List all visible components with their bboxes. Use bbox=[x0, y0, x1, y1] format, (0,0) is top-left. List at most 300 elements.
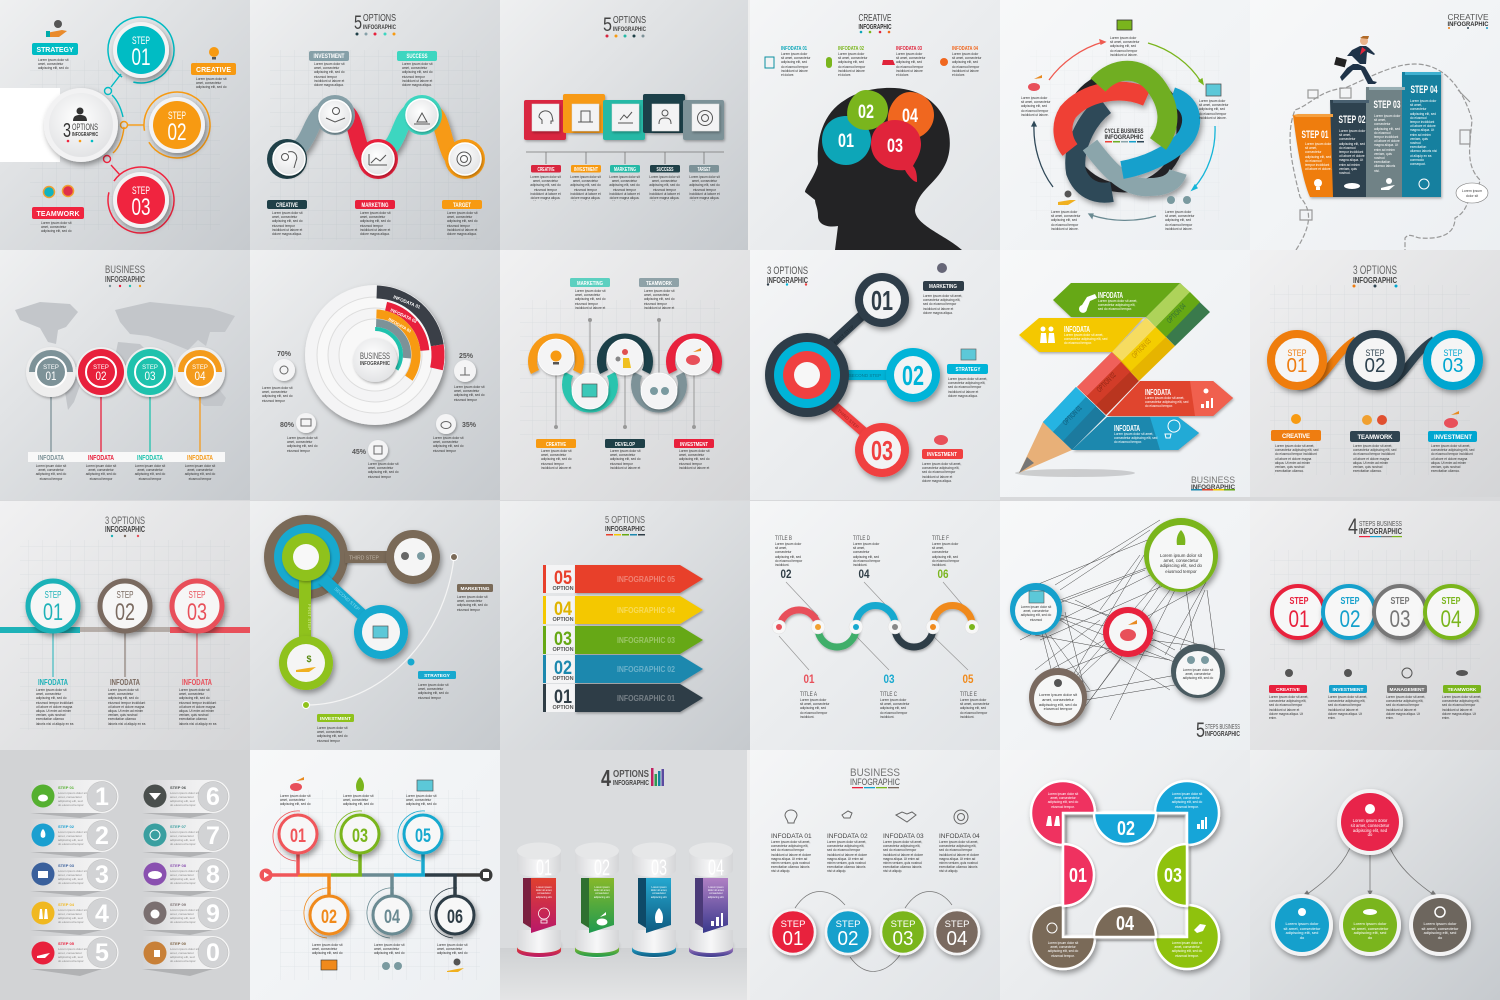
arc labels: INFODATA 01 bbox=[393, 294, 422, 310]
step captions: STEP 07 bbox=[170, 824, 187, 829]
digits: 9 bbox=[206, 900, 220, 928]
option numbers: OPTION bbox=[552, 617, 574, 623]
column headings: INFODATA 03 bbox=[883, 833, 924, 840]
panel: 5 options wave bbox=[250, 0, 500, 250]
labels bbox=[317, 584, 493, 722]
node second bbox=[354, 605, 408, 659]
step labels: STEP bbox=[945, 919, 969, 930]
brain: 04 bbox=[902, 106, 918, 127]
cylinder 03 bbox=[632, 842, 676, 958]
labels: CREATIVE bbox=[538, 167, 555, 173]
segment 1 blue bbox=[1043, 387, 1106, 450]
step 01: 01 bbox=[1288, 606, 1310, 633]
card text col 2: adipiscing elit, sed bbox=[170, 916, 195, 920]
step captions: STEP 00 bbox=[170, 941, 187, 946]
box icons bbox=[539, 110, 712, 126]
step 02: STEP bbox=[116, 590, 134, 601]
discs: 02 bbox=[96, 369, 107, 383]
thin curve bbox=[306, 557, 454, 705]
percent callouts: 25% bbox=[459, 353, 474, 360]
card text col 2: adipiscing elit, sed bbox=[170, 955, 195, 959]
panel: concentric rings bbox=[250, 250, 500, 500]
option numbers: OPTION bbox=[552, 705, 574, 711]
digits: 3 bbox=[95, 861, 109, 889]
bar headings: STEP 01 bbox=[1302, 129, 1328, 141]
ring 01: STEP bbox=[1288, 348, 1306, 358]
percent callouts: 70% bbox=[277, 351, 292, 358]
infodata strip: INFODATA bbox=[187, 455, 213, 462]
panel: 4 cylinders bbox=[500, 750, 750, 1000]
cylinder 02 bbox=[575, 842, 619, 958]
panel: 5 option arrows bbox=[500, 501, 750, 750]
corner blue: Lorem ipsum dolor sit amet, consectetur adipiscing elit, sed do eiusmod tempor. bbox=[1172, 792, 1202, 809]
blue arrow: Lorem ipsum dolor sit amet, consectetur adipiscing elit, sed do eiusmod tempor. bbox=[1114, 432, 1157, 444]
column headings: INFODATA 04 bbox=[939, 833, 980, 840]
step 01: STEP bbox=[1290, 596, 1309, 607]
ring center: INFOGRAPHIC bbox=[360, 361, 390, 367]
step 01: 01 bbox=[132, 44, 150, 71]
cylinder 04: 04 bbox=[708, 855, 724, 880]
card text col 1: amet, consectetur bbox=[58, 795, 82, 799]
step labels: 03 bbox=[892, 928, 914, 950]
title bbox=[1196, 719, 1240, 742]
text investment: Lorem ipsum dolor sit amet, consectetur adipiscing elit, sed do eiusmod tempor incididunt ut labore et dolore magna aliqua. bbox=[922, 462, 961, 483]
world map bbox=[15, 302, 235, 410]
card text col 1: adipiscing elit, sed bbox=[58, 799, 83, 803]
ring 03 bbox=[1427, 334, 1479, 386]
step captions: STEP 02 bbox=[58, 824, 75, 829]
card text col 1: adipiscing elit, sed bbox=[58, 877, 83, 881]
boxes bbox=[524, 94, 724, 140]
arm labels bbox=[833, 324, 881, 430]
panel: 3 options ribbon bbox=[0, 501, 250, 750]
node 06: 06 bbox=[447, 907, 463, 928]
creative text: Lorem ipsum dolor sit amet, consectetur adipiscing elit, sed do bbox=[196, 77, 226, 89]
column headers: INFODATA 01 bbox=[781, 46, 807, 52]
title: BUSINESS bbox=[105, 264, 145, 276]
step captions: STEP 03 bbox=[58, 863, 75, 868]
digits: 8 bbox=[206, 861, 220, 889]
arm labels: SECOND STEP bbox=[849, 373, 881, 378]
step 02: STEP bbox=[168, 110, 186, 122]
text 2: Lorem ipsum dolor sit amet, consectetur adipiscing elit, sed do eiusmod tempor incididunt ut labore et dolore magna aliqua. Ut enim. bbox=[1328, 695, 1367, 720]
node rocket: Lorem ipsum dolor sit amet, consectetur adipiscing elit, sed do eiusmod tempor bbox=[1160, 553, 1202, 574]
labels: MARKETING bbox=[929, 284, 957, 290]
text 2: Lorem ipsum dolor sit amet, consectetur adipiscing elit, sed do eiusmod tempor incididunt ut labore et dolore magna aliqua. Ut enim ad minim veniam, quis nostrud exercitation ullamco. bbox=[1353, 444, 1396, 473]
head silhouette bbox=[805, 88, 962, 250]
text 3: Lorem ipsum dolor sit amet, consectetur adipiscing elit, sed do eiusmod tempor incididunt ut labore et dolore magna aliqua. Ut enim ad minim veniam, quis nostrud exercitation ullamco laboris nisi ut aliquip. bbox=[883, 840, 923, 873]
node 04: 04 bbox=[384, 907, 400, 928]
card text col 2 bbox=[170, 791, 199, 963]
card text col 1: do eiusmod tempor bbox=[58, 803, 84, 807]
center disc bbox=[44, 88, 118, 162]
node 02 bbox=[310, 896, 348, 934]
text 2: Lorem ipsum dolor sit amet, consectetur adipiscing elit, sed do eiusmod tempor incididunt ut labore et dolore magna aliqua. Ut enim ad minim veniam, quis nostrud exercitation ullamco laboris nisi ut aliquip. bbox=[827, 840, 867, 873]
title: 3 OPTIONS bbox=[1353, 263, 1397, 277]
card text col 1: adipiscing elit, sed bbox=[58, 955, 83, 959]
runner icon bbox=[1334, 36, 1377, 84]
card text col 1: amet, consectetur bbox=[58, 873, 82, 877]
text marketing: Lorem ipsum dolor sit amet, consectetur adipiscing elit, sed do eiusmod tempor incididunt ut labore et dolore magna aliqua. bbox=[923, 294, 962, 315]
discs: STEP bbox=[93, 365, 109, 371]
arm labels: SECOND STEP bbox=[333, 586, 361, 612]
segment 02 bbox=[1094, 813, 1156, 844]
ribbon knot bbox=[1063, 71, 1191, 193]
arc labels: INFODATA 02 bbox=[390, 307, 418, 324]
text 1: Lorem ipsum dolor sit amet, consectetur adipiscing elit, sed do eiusmod tempor incididunt ut labore et dolore. bbox=[1305, 142, 1332, 171]
cards bbox=[30, 780, 230, 969]
text 3: Lorem ipsum dolor sit amet, consectetur adipiscing elit, sed do eiusmod tempor incididunt ut labore et dolore magna aliqua. Ut enim ad minim veniam, quis nostrud exercitation ullamco laboris nisi. bbox=[1374, 114, 1400, 173]
column icons bbox=[785, 810, 968, 824]
business title bbox=[1191, 475, 1235, 491]
chain discs bbox=[538, 339, 712, 409]
card text col 1: Lorem ipsum dolor sit bbox=[58, 869, 87, 873]
headings: INFODATA bbox=[38, 677, 68, 687]
title: INFOGRAPHIC bbox=[1359, 527, 1402, 536]
blue arrow: INFODATA bbox=[1114, 424, 1140, 433]
step captions: STEP 08 bbox=[170, 863, 187, 868]
text top: Lorem ipsum dolor sit amet, consectetur adipiscing elit, sed do eiusmod tempor incididunt ut labore. bbox=[1110, 36, 1139, 57]
column headings bbox=[771, 833, 980, 840]
green arrow: Lorem ipsum dolor sit amet, consectetur adipiscing elit, sed do eiusmod tempor. bbox=[1098, 299, 1137, 311]
card text col 2: do eiusmod tempor bbox=[170, 959, 196, 963]
corner red: Lorem ipsum dolor sit amet, consectetur adipiscing elit, sed do eiusmod tempor. bbox=[1048, 792, 1078, 809]
node 02 bbox=[886, 348, 940, 402]
panel: pencil arrows bbox=[1000, 250, 1250, 497]
node 03 bbox=[341, 815, 379, 853]
top labels bbox=[309, 51, 437, 61]
curved arrows bbox=[795, 892, 952, 971]
red arrow: INFODATA bbox=[1145, 388, 1171, 397]
card text col 2: amet, consectetur bbox=[170, 951, 194, 955]
title: OPTIONS bbox=[363, 13, 396, 24]
step 03: STEP bbox=[132, 185, 150, 197]
card text col 1: do eiusmod tempor bbox=[58, 920, 84, 924]
business title: INFOGRAPHIC bbox=[1191, 484, 1235, 491]
step 01 bbox=[1272, 586, 1324, 638]
node 01 bbox=[279, 815, 317, 853]
step 04: 04 bbox=[1440, 606, 1462, 633]
title: INFOGRAPHIC bbox=[850, 777, 900, 787]
brain bbox=[822, 90, 934, 182]
step 03: 03 bbox=[187, 599, 207, 626]
step 02 bbox=[100, 581, 150, 631]
step 04: STEP bbox=[1442, 596, 1461, 607]
titles bbox=[775, 536, 977, 698]
frame bbox=[1063, 813, 1187, 937]
bar headings: STEP 04 bbox=[1410, 84, 1438, 96]
card text col 2: Lorem ipsum dolor sit bbox=[170, 947, 199, 951]
ring 03: 03 bbox=[1442, 355, 1464, 377]
bar icons bbox=[1314, 178, 1429, 190]
numbers: 06 bbox=[938, 567, 949, 581]
text 3: Lorem ipsum dolor sit amet, consectetur adipiscing elit, sed do eiusmod tempor incididunt ut labore et dolore magna aliqua. Ut enim. bbox=[1386, 695, 1425, 720]
outer arcs bbox=[273, 811, 457, 938]
discs: STEP bbox=[142, 365, 158, 371]
labels: CREATIVE bbox=[546, 442, 567, 448]
corner brown bbox=[1031, 905, 1095, 969]
title: BUSINESS bbox=[850, 767, 900, 779]
title: 4 bbox=[601, 765, 611, 791]
step 02 bbox=[139, 87, 215, 163]
node 02: 02 bbox=[321, 907, 337, 928]
text 1: Lorem ipsum dolor sit amet, consectetur adipiscing elit, sed do eiusmod tempor incididunt ut labore et dolore. bbox=[781, 52, 810, 77]
title: INFOGRAPHIC bbox=[858, 24, 892, 31]
step 02: 02 bbox=[115, 599, 135, 626]
chain rings bbox=[532, 338, 717, 408]
infodata strip: INFODATA bbox=[137, 455, 163, 462]
step bars bbox=[1293, 72, 1441, 197]
card text col 1: adipiscing elit, sed bbox=[58, 916, 83, 920]
numbers bbox=[780, 567, 974, 686]
labels bbox=[1269, 668, 1481, 693]
labels: DEVELOP bbox=[615, 442, 636, 448]
labels bbox=[531, 165, 719, 173]
infodata strip: INFODATA bbox=[38, 455, 64, 462]
text a: Lorem ipsum dolor sit amet, consectetur adipiscing elit, sed do eiusmod tempor incididunt. bbox=[800, 698, 829, 719]
titles: TITLE B bbox=[775, 536, 792, 542]
segment 03: 03 bbox=[1164, 865, 1182, 887]
panel: business map bbox=[0, 250, 250, 500]
blue arrow bbox=[1072, 417, 1199, 450]
strategy label: STRATEGY bbox=[36, 47, 74, 54]
option numbers bbox=[552, 568, 574, 711]
title bbox=[767, 265, 808, 286]
links bbox=[1297, 340, 1434, 385]
pencil tip bbox=[1019, 422, 1072, 473]
labels: CREATIVE bbox=[1276, 687, 1301, 693]
segment 2 red bbox=[1077, 352, 1139, 415]
arm labels bbox=[307, 556, 380, 630]
panel: tree diagram bbox=[1250, 750, 1500, 1000]
speech bubble bbox=[1456, 183, 1488, 203]
red arrow bbox=[1107, 381, 1233, 416]
text 4: Lorem ipsum dolor sit amet, consectetur adipiscing elit, sed do eiusmod tempor incididunt ut labore et dolore magna aliqua. Ut enim ad minim veniam, quis nostrud exercitation ullamco laboris nisi ut aliquip ex ea commodo consequat. bbox=[1410, 99, 1437, 166]
card shadows bbox=[30, 813, 213, 976]
arcs bbox=[310, 290, 440, 420]
title bbox=[850, 767, 900, 788]
text strategy: Lorem ipsum dolor sit amet, consectetur adipiscing elit, sed do eiusmod tempor incididunt ut labore et dolore magna aliqua. bbox=[948, 377, 987, 398]
bar headings: STEP 02 bbox=[1338, 114, 1366, 126]
step captions bbox=[58, 785, 187, 946]
axis bbox=[266, 850, 486, 898]
panel: 5 rings chain bbox=[500, 250, 750, 500]
step 03: STEP bbox=[188, 590, 206, 601]
card text col 2: do eiusmod tempor bbox=[170, 842, 196, 846]
text 4: Lorem ipsum dolor sit amet, consectetur adipiscing elit, sed do eiusmod tempor incididunt ut labore et dolore. bbox=[952, 52, 981, 77]
column headings: INFODATA 02 bbox=[827, 833, 868, 840]
brain: 02 bbox=[858, 102, 874, 123]
cylinder 04: Lorem ipsum dolor sit amet, consectetur adipiscing elit. bbox=[708, 886, 724, 899]
digits: 0 bbox=[206, 939, 220, 967]
title: INFOGRAPHIC bbox=[1205, 731, 1240, 738]
card text col 2: adipiscing elit, sed bbox=[170, 799, 195, 803]
segment 3 yellow bbox=[1112, 318, 1175, 381]
step labels: 02 bbox=[838, 928, 858, 950]
title: INFOGRAPHIC bbox=[363, 24, 396, 31]
step labels bbox=[781, 919, 969, 950]
ring 03: STEP bbox=[1444, 348, 1462, 358]
cylinder 01: 01 bbox=[536, 855, 552, 880]
step 01: STEP bbox=[44, 590, 62, 601]
numbers: 05 bbox=[962, 672, 974, 686]
headings: INFODATA bbox=[110, 677, 140, 687]
node 01: 01 bbox=[871, 285, 893, 316]
card text col 1: Lorem ipsum dolor sit bbox=[58, 791, 87, 795]
ring center bbox=[353, 338, 397, 382]
column headers: INFODATA 02 bbox=[838, 46, 864, 52]
option numbers: OPTION bbox=[552, 676, 574, 682]
node person bbox=[1029, 668, 1087, 726]
node heads: Lorem ipsum dolor sit amet, consectetur adipiscing elit, sed do bbox=[1183, 668, 1213, 680]
title: INFOGRAPHIC bbox=[613, 26, 646, 33]
panel: horizontal timeline bbox=[250, 750, 500, 1000]
segment 2 red: OPTION 02 bbox=[1095, 371, 1118, 394]
step captions: STEP 05 bbox=[58, 941, 75, 946]
hub ring bbox=[282, 533, 330, 581]
ring 01: 01 bbox=[1286, 355, 1308, 377]
step captions: STEP 04 bbox=[58, 902, 75, 907]
text right: Lorem ipsum dolor sit amet, consectetur adipiscing elit, sed do eiusmod tempor incididunt ut labore. bbox=[1199, 99, 1228, 120]
arrows bbox=[575, 565, 703, 712]
node 03: 03 bbox=[871, 435, 893, 466]
card text col 2: do eiusmod tempor bbox=[170, 920, 196, 924]
rings bbox=[305, 285, 445, 425]
arms bbox=[818, 308, 895, 434]
node heads bbox=[1171, 644, 1225, 698]
text 4: Lorem ipsum dolor sit amet, consectetur adipiscing elit, sed do eiusmod tempor incididunt ut labore et dolore magna aliqua. Ut enim. bbox=[1442, 695, 1481, 720]
node 02: 02 bbox=[902, 360, 924, 391]
option numbers: 02 bbox=[554, 658, 572, 679]
center disc: 3 bbox=[63, 120, 71, 142]
text f: Lorem ipsum dolor sit amet, consectetur adipiscing elit, sed do eiusmod tempor incididunt. bbox=[932, 542, 959, 567]
digits: 6 bbox=[206, 783, 220, 811]
title: INFOGRAPHIC bbox=[105, 275, 145, 284]
card text col 2: amet, consectetur bbox=[170, 873, 194, 877]
column headers bbox=[765, 46, 979, 68]
panel: network bbox=[1000, 501, 1250, 750]
title bbox=[105, 264, 145, 287]
text bottom left: Lorem ipsum dolor sit amet, consectetur adipiscing elit, sed do eiusmod tempor incididunt ut labore. bbox=[1051, 210, 1080, 231]
panel: 3 options infinity bbox=[1250, 250, 1500, 497]
panel: creative head bbox=[750, 0, 1000, 250]
title bbox=[354, 13, 396, 36]
corner green: Lorem ipsum dolor sit amet, consectetur adipiscing elit, sed do eiusmod tempor. bbox=[1172, 941, 1202, 958]
card text col 1: Lorem ipsum dolor sit bbox=[58, 830, 87, 834]
labels: TEAMWORK bbox=[646, 281, 672, 287]
digits: 5 bbox=[95, 939, 109, 967]
discs: 03 bbox=[144, 369, 156, 383]
step labels: STEP bbox=[781, 919, 805, 930]
title: INFOGRAPHIC bbox=[1448, 22, 1489, 28]
step 03: 03 bbox=[1390, 606, 1410, 633]
tip shadow bbox=[1015, 469, 1135, 477]
hub bbox=[264, 515, 348, 599]
brain: 03 bbox=[887, 136, 903, 157]
segment 4 green: OPTION 04 bbox=[1165, 302, 1188, 325]
green arrow bbox=[1053, 283, 1180, 317]
arrow captions: INFOGRAPHIC 03 bbox=[617, 636, 675, 645]
card text col 2: amet, consectetur bbox=[170, 795, 194, 799]
card text col 1: do eiusmod tempor bbox=[58, 959, 84, 963]
node 04 bbox=[373, 896, 411, 934]
panel: title timeline bbox=[750, 501, 1000, 750]
title: CREATIVE bbox=[858, 13, 892, 24]
labels: INVESTMENT bbox=[320, 716, 351, 722]
yellow arrow: Lorem ipsum dolor sit amet, consectetur adipiscing elit, sed do eiusmod tempor. bbox=[1064, 333, 1107, 345]
digits: 1 bbox=[95, 783, 109, 811]
timeline bbox=[526, 152, 724, 164]
step 03: 03 bbox=[132, 194, 150, 221]
column headers: INFODATA 04 bbox=[952, 46, 979, 52]
step discs bbox=[771, 910, 979, 954]
corner blue bbox=[1155, 781, 1219, 845]
wave nodes bbox=[772, 620, 979, 634]
node first: $ bbox=[306, 654, 312, 664]
arrow captions: INFOGRAPHIC 01 bbox=[617, 694, 675, 703]
cylinder 03: Lorem ipsum dolor sit amet, consectetur adipiscing elit. bbox=[651, 886, 667, 899]
node 05 bbox=[404, 815, 442, 853]
segment 02: 02 bbox=[1117, 818, 1135, 840]
knot label bbox=[1104, 129, 1144, 142]
panel: cycle business bbox=[1000, 0, 1250, 250]
labels: MARKETING bbox=[460, 586, 490, 592]
ring 02: STEP bbox=[1366, 348, 1384, 358]
digits: 4 bbox=[95, 900, 109, 928]
top node bbox=[1337, 789, 1403, 855]
labels and icons: CREATIVE bbox=[1282, 434, 1310, 440]
labels and icons: INVESTMENT bbox=[1434, 435, 1472, 441]
discs: STEP bbox=[43, 365, 59, 371]
text c: Lorem ipsum dolor sit amet, consectetur adipiscing elit, sed do eiusmod tempor incididunt. bbox=[880, 698, 909, 719]
arrow captions: INFOGRAPHIC 02 bbox=[617, 665, 675, 674]
step captions: STEP 01 bbox=[58, 785, 75, 790]
labels: STRATEGY bbox=[956, 367, 981, 373]
infodata strip: INFODATA bbox=[88, 455, 114, 462]
red arrow: Lorem ipsum dolor sit amet, consectetur adipiscing elit, sed do eiusmod tempor. bbox=[1145, 396, 1188, 408]
node 06 bbox=[436, 896, 474, 934]
segment 04: 04 bbox=[1116, 913, 1135, 935]
labels: STRATEGY bbox=[424, 673, 451, 679]
arm labels: FIRST STEP bbox=[307, 604, 312, 630]
creative label bbox=[191, 47, 236, 75]
creative label: CREATIVE bbox=[196, 67, 231, 74]
center disc: OPTIONS bbox=[72, 122, 98, 132]
step labels: STEP bbox=[836, 919, 860, 930]
title bbox=[105, 515, 145, 537]
arm labels: THIRD STEP bbox=[349, 556, 380, 562]
titles: TITLE E bbox=[960, 692, 977, 698]
text 1: Lorem ipsum dolor sit amet, consectetur adipiscing elit, sed do eiusmod tempor incididunt ut labore et dolore magna aliqua. Ut enim. bbox=[1269, 695, 1308, 720]
labels: MANAGEMENT bbox=[1390, 687, 1425, 693]
title: 3 OPTIONS bbox=[105, 515, 145, 527]
leader lines bbox=[779, 582, 972, 670]
numbers: 03 bbox=[884, 672, 895, 686]
wave bbox=[287, 108, 465, 165]
network lines bbox=[1015, 520, 1225, 720]
connectors bbox=[104, 74, 144, 175]
titles: TITLE F bbox=[932, 536, 949, 542]
arc labels: INFODATA 03 bbox=[388, 317, 413, 334]
arm labels: FIRST STEP bbox=[833, 324, 855, 346]
chain icons bbox=[550, 348, 701, 397]
title: INFOGRAPHIC bbox=[613, 778, 649, 787]
step labels: STEP bbox=[891, 919, 915, 930]
corner green bbox=[1155, 905, 1219, 969]
title: OPTIONS bbox=[613, 768, 649, 780]
node 03 bbox=[855, 423, 909, 477]
text 1: Lorem ipsum dolor sit amet, consectetur adipiscing elit, sed do eiusmod tempor incididunt ut labore et dolore magna aliqua. Ut enim ad minim veniam, quis nostrud exercitation ullamco. bbox=[1275, 444, 1318, 473]
